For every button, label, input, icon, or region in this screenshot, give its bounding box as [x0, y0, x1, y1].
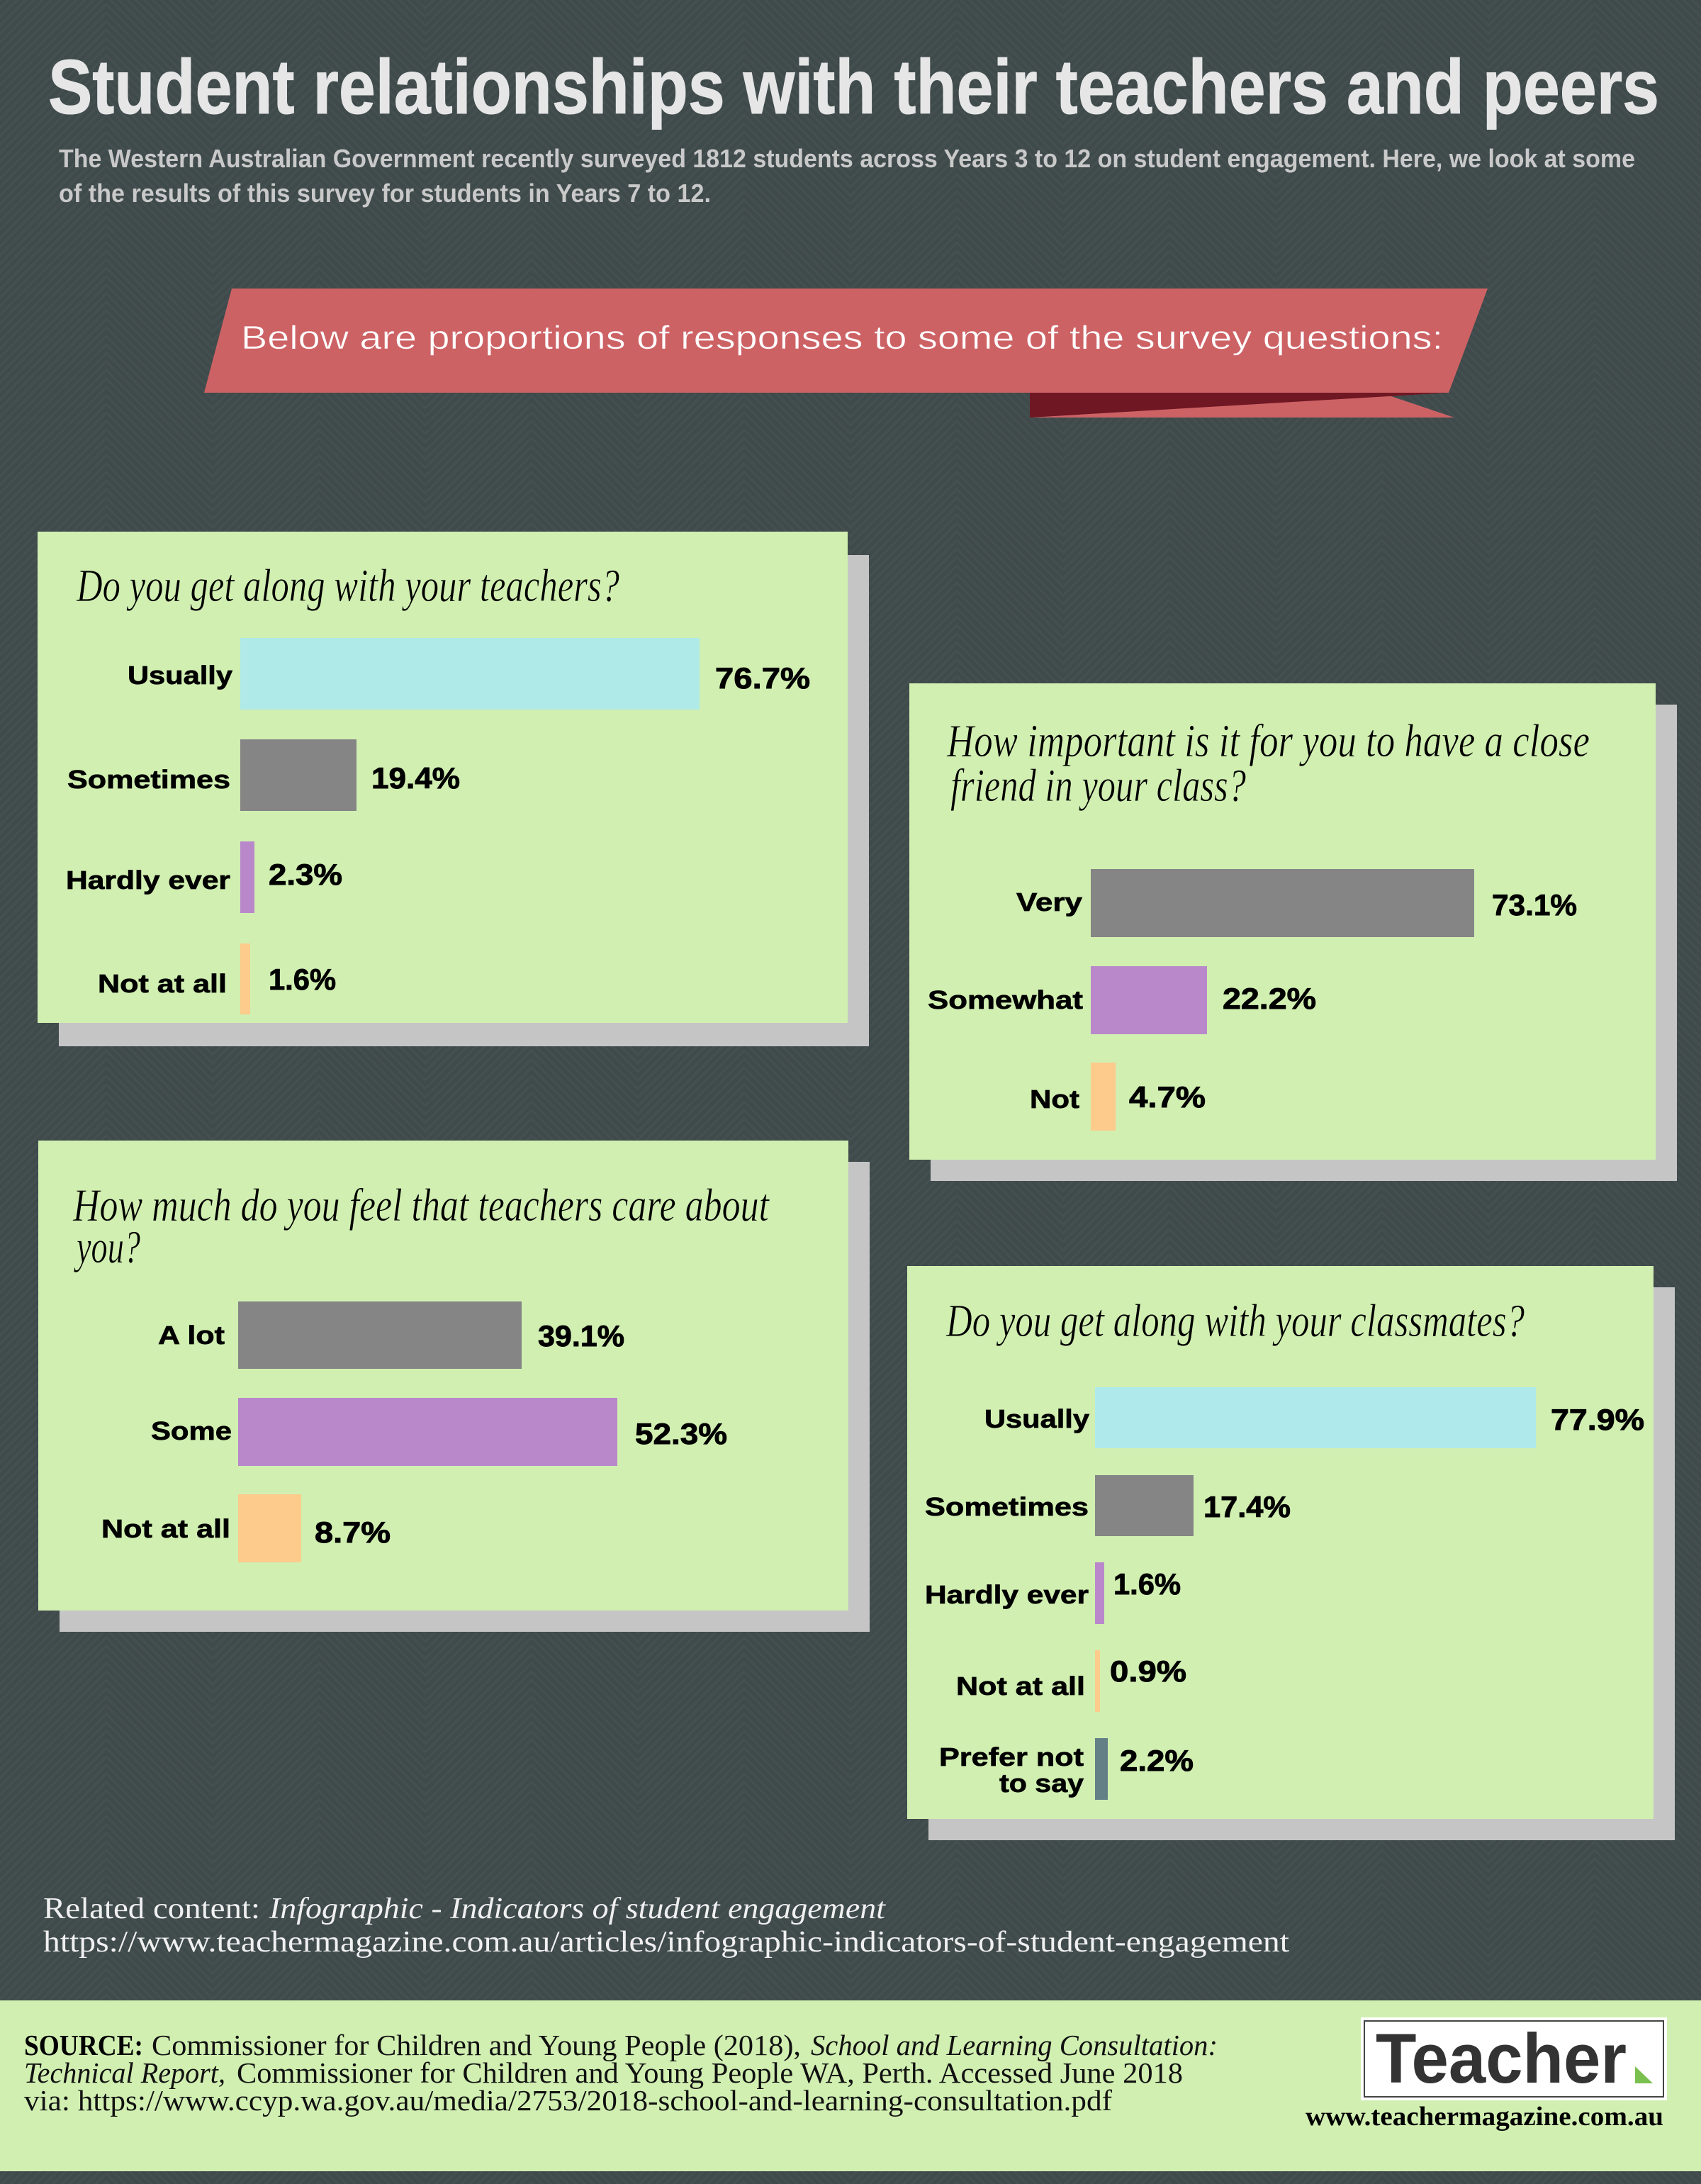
bar: hardly ever: [925, 1562, 1181, 1624]
bar: sometimes: [67, 739, 460, 811]
bar: hardly ever: 2.3%: [269, 858, 342, 891]
source text: School and Learning Consultation:: [811, 2029, 1218, 2061]
bar: not: Not: [1030, 1085, 1079, 1114]
intro text: [59, 144, 1635, 208]
bar: sometimes: Sometimes: [67, 765, 230, 794]
bar: very: 73.1%: [1492, 888, 1577, 922]
intro text: of the results of this survey for students in Years 7 to 12.: [59, 179, 711, 208]
source text: Technical Report,: [24, 2056, 225, 2089]
website: www.teachermagazine.com.au: [1306, 2102, 1663, 2132]
question heading: you?: [74, 1221, 140, 1273]
bar: prefer not to say: 2.2%: [1120, 1744, 1194, 1777]
bar: a lot: A lot: [158, 1321, 225, 1350]
bar: very: Very: [1016, 887, 1082, 917]
bar: not at all: [98, 943, 336, 1014]
source text: Commissioner for Children and Young People (2018),: [152, 2029, 801, 2061]
source text: SOURCE:: [24, 2029, 143, 2061]
bar: not at all: Not at all: [101, 1514, 230, 1543]
bar: usually: [984, 1387, 1644, 1448]
bar: usually: 77.9%: [1551, 1403, 1644, 1436]
panel: teachers care: [38, 1141, 870, 1632]
question heading: Do you get along with your classmates?: [945, 1295, 1525, 1347]
source text: via: https://www.ccyp.wa.gov.au/media/2753/2018-school-and-learning-consultation.pdf: [24, 2084, 1112, 2117]
bar: not at all: Not at all: [98, 969, 227, 998]
bar: not at all: 0.9%: [1110, 1654, 1186, 1688]
panel: get along with teachers: [38, 532, 869, 1046]
bar: sometimes: Sometimes: [925, 1492, 1089, 1521]
panel: get along with classmates: [907, 1266, 1675, 1840]
bar: hardly ever: [66, 841, 342, 913]
bar: usually: [128, 638, 810, 710]
bar: somewhat: 22.2%: [1223, 982, 1316, 1015]
footer band: [0, 2000, 1701, 2171]
bar: usually: 76.7%: [715, 661, 810, 695]
bar: not at all: 8.7%: [315, 1516, 391, 1549]
bar: sometimes: [925, 1475, 1291, 1536]
banner: ribbon with heading: Below are proportions of responses to some of the survey questions:: [241, 319, 1443, 356]
question heading: Do you get along with your teachers?: [76, 560, 619, 612]
bar: prefer not to say: Prefer not: [939, 1742, 1084, 1771]
bar: sometimes: 19.4%: [371, 761, 460, 795]
source text: [24, 2029, 1218, 2117]
bar: not at all: [101, 1494, 391, 1562]
bar: hardly ever: Hardly ever: [66, 866, 230, 895]
panel: close friend in class: [909, 683, 1677, 1181]
bar: some: [151, 1398, 727, 1466]
bar: some: Some: [151, 1416, 232, 1445]
bar: very: [1016, 869, 1577, 937]
question heading: [72, 1180, 770, 1273]
question heading: How much do you feel that teachers care about: [72, 1180, 770, 1231]
logo: Teacher: Teacher: [1376, 2019, 1627, 2098]
bar: not: [1030, 1063, 1206, 1131]
bar: not: 4.7%: [1129, 1080, 1206, 1114]
bar: some: 52.3%: [635, 1417, 727, 1450]
bar: hardly ever: 1.6%: [1113, 1567, 1181, 1601]
related content: Infographic - Indicators of student engagement: [269, 1893, 886, 1925]
bar: usually: Usually: [984, 1404, 1089, 1433]
banner: ribbon with heading: [204, 289, 1488, 418]
bar: usually: Usually: [128, 661, 232, 690]
bar: a lot: [158, 1301, 624, 1369]
related content: Related content:: [43, 1893, 260, 1925]
bar: sometimes: 17.4%: [1203, 1490, 1291, 1523]
bar: somewhat: Somewhat: [928, 985, 1083, 1014]
related content: [43, 1893, 1289, 1959]
bar: prefer not to say: [939, 1738, 1194, 1800]
bar: not at all: [956, 1650, 1186, 1712]
question heading: [946, 715, 1590, 812]
bar: somewhat: [928, 966, 1316, 1034]
bar: hardly ever: Hardly ever: [925, 1580, 1089, 1609]
bar: not at all: 1.6%: [269, 963, 336, 996]
question heading: friend in your class?: [950, 760, 1246, 812]
source text: Commissioner for Children and Young People WA, Perth. Accessed June 2018: [237, 2056, 1183, 2089]
intro text: The Western Australian Government recently surveyed 1812 students across Years 3 to 12 on student engagement. Here, we look at some: [59, 144, 1635, 173]
bar: not at all: Not at all: [956, 1671, 1085, 1701]
bar: prefer not to say: to say: [999, 1769, 1084, 1798]
related content: https://www.teachermagazine.com.au/articles/infographic-indicators-of-student-engagement: [43, 1926, 1289, 1959]
bar: a lot: 39.1%: [538, 1319, 624, 1353]
